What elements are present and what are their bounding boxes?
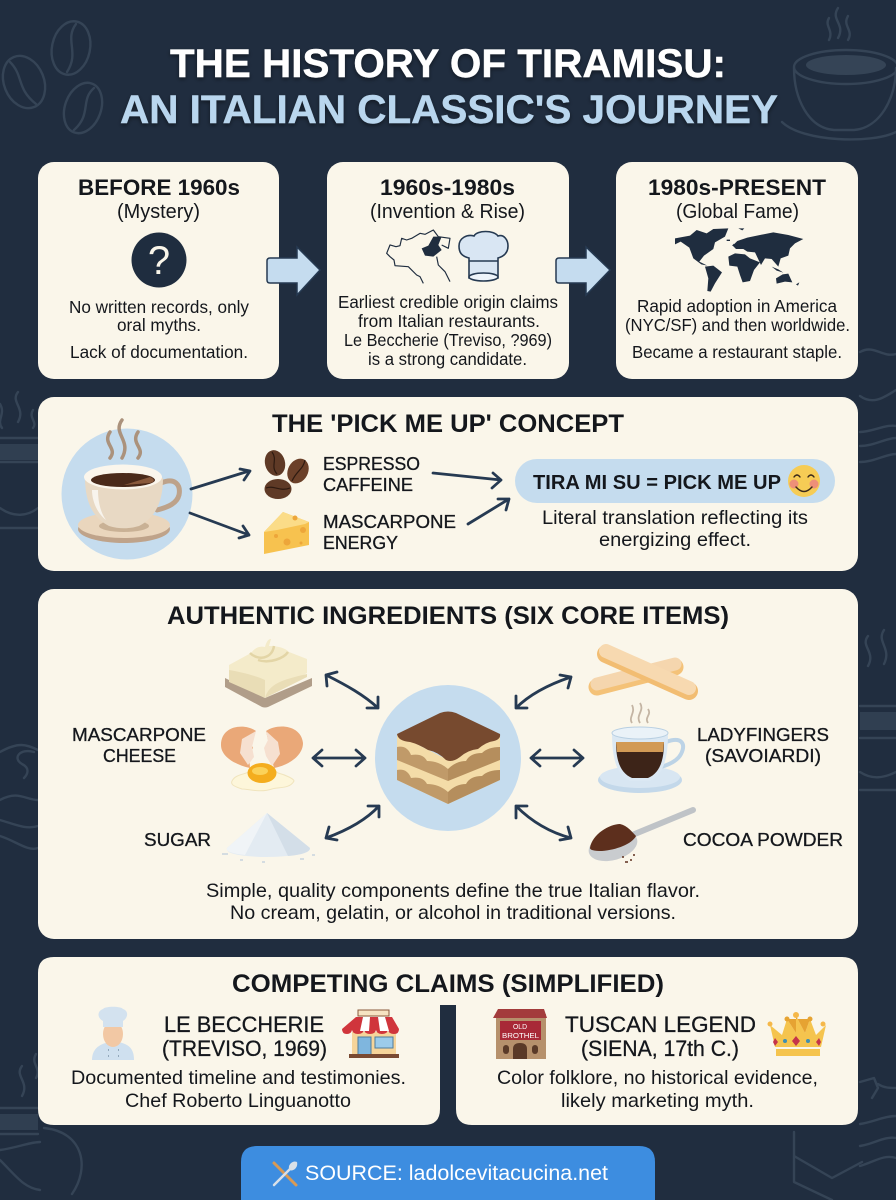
- icon: espresso cup: [598, 703, 683, 793]
- label: ladyfingers: LADYFINGERS: [697, 725, 829, 745]
- title: THE HISTORY OF TIRAMISU:: [170, 42, 726, 86]
- text: ingredients note: Simple, quality components define the true Italian flavor.: [206, 880, 700, 902]
- label: mascarpone: MASCARPONE: [323, 512, 456, 532]
- icon: chef hat: [459, 232, 508, 281]
- panel: 1980s-present: Rapid adoption in America: [637, 296, 837, 316]
- text: tuscan legend details: likely marketing myth.: [561, 1090, 754, 1112]
- icon: chef: [92, 1007, 134, 1060]
- panel: 1960s-1980s: (Invention & Rise): [370, 201, 525, 223]
- heading: THE 'PICK ME UP' CONCEPT: [272, 410, 624, 438]
- text: le beccherie details: [71, 1067, 406, 1112]
- heading: AUTHENTIC INGREDIENTS (SIX CORE ITEMS): [167, 602, 729, 630]
- source badge: [241, 1146, 655, 1200]
- panel: before 1960s: Lack of documentation.: [70, 342, 248, 362]
- icon: question mark: [132, 232, 186, 288]
- label: cocoa powder: COCOA POWDER: [683, 830, 843, 850]
- text: literal translation: [542, 507, 808, 551]
- heading: tuscan legend: TUSCAN LEGEND: [565, 1012, 756, 1037]
- icon: smiling face: [788, 465, 820, 497]
- icon: coffee beans: [262, 448, 313, 499]
- arrow: espresso to phrase: [433, 473, 501, 488]
- heading: le beccherie: [162, 1012, 327, 1061]
- arrow: cup to espresso: [191, 469, 250, 489]
- icon: crown: [768, 1012, 826, 1056]
- heading: tuscan legend: (SIENA, 17th C.): [581, 1036, 739, 1061]
- label: ladyfingers: (SAVOIARDI): [705, 746, 821, 766]
- label: mascarpone cheese: CHEESE: [103, 746, 176, 766]
- icon: cocoa spoon: [585, 810, 693, 866]
- text: ingredients note: No cream, gelatin, or alcohol in traditional versions.: [230, 902, 676, 924]
- panel: 1980s-present: (Global Fame): [676, 201, 799, 223]
- arrow: invention to global: [556, 247, 610, 295]
- icon: cheese: [264, 512, 309, 554]
- arrow: sugar link: [326, 806, 379, 840]
- panel: before 1960s: oral myths.: [117, 315, 201, 335]
- arrow: ladyfingers link: [516, 675, 571, 708]
- arrow: before to invention: [267, 247, 320, 295]
- icon: question mark: ?: [148, 239, 170, 283]
- label: espresso: [323, 454, 420, 495]
- text: le beccherie details: Chef Roberto Linguanotto: [125, 1090, 351, 1112]
- panel: competing claims: [38, 957, 858, 1125]
- panel: 1980s-present: 1980s-PRESENT: [648, 175, 827, 200]
- callout: tira mi su: TIRA MI SU = PICK ME UP: [533, 472, 781, 494]
- label: espresso: CAFFEINE: [323, 475, 413, 495]
- source badge: SOURCE: ladolcevitacucina.net: [305, 1162, 608, 1185]
- panel: 1960s-1980s: 1960s-1980s: [380, 175, 515, 200]
- text: tuscan legend details: [497, 1067, 818, 1112]
- text: literal translation: Literal translation reflecting its: [542, 507, 808, 529]
- icon: ladyfingers: [597, 651, 689, 691]
- heading: tuscan legend: [565, 1012, 756, 1061]
- panel: before 1960s: [38, 162, 279, 379]
- icon: map of northern Italy: [387, 230, 450, 283]
- heading: le beccherie: LE BECCHERIE: [164, 1012, 324, 1037]
- panel: 1960s-1980s: Earliest credible origin claims: [338, 292, 558, 312]
- panel: before 1960s: BEFORE 1960s: [78, 175, 240, 200]
- icon: shop: [342, 1010, 399, 1058]
- title: [120, 42, 778, 132]
- arrow: cup to mascarpone: [190, 513, 249, 538]
- callout: tira mi su: [515, 459, 835, 503]
- text: literal translation: energizing effect.: [599, 529, 751, 551]
- label: mascarpone: [323, 512, 456, 553]
- text: le beccherie details: Documented timeline and testimonies.: [71, 1067, 406, 1089]
- heading: le beccherie: (TREVISO, 1969): [162, 1036, 327, 1061]
- panel: authentic ingredients: [38, 589, 858, 939]
- panel: 1960s-1980s: Le Beccherie (Treviso, ?969): [344, 330, 552, 350]
- panel: before 1960s: (Mystery): [117, 201, 200, 223]
- icon: world map: [675, 228, 803, 292]
- icon: coffee cup: [62, 420, 192, 560]
- panel: 1980s-present: Became a restaurant staple.: [632, 342, 842, 362]
- panel: 1980s-present: (NYC/SF) and then worldwide.: [625, 315, 850, 335]
- panel: 1960s-1980s: is a strong candidate.: [368, 349, 527, 369]
- arrow: cream link: [326, 672, 378, 708]
- arrow: mascarpone to phrase: [468, 499, 509, 524]
- label: mascarpone: ENERGY: [323, 533, 398, 553]
- icon: tiramisu slice: [375, 685, 521, 831]
- panel: pick me up concept: [38, 397, 858, 571]
- label: ladyfingers: [697, 725, 829, 766]
- icon: old brothel: OLD: [513, 1024, 527, 1031]
- icon: sugar pile: [222, 813, 315, 862]
- icon: eggs: [221, 727, 303, 791]
- panel: before 1960s: No written records, only: [69, 297, 249, 317]
- icon: old brothel: [493, 1009, 547, 1059]
- text: ingredients note: [206, 880, 700, 924]
- label: sugar: SUGAR: [144, 830, 211, 850]
- icon: old brothel: BROTHEL: [502, 1033, 539, 1040]
- label: espresso: ESPRESSO: [323, 454, 420, 474]
- heading: COMPETING CLAIMS (SIMPLIFIED): [232, 970, 664, 998]
- label: mascarpone cheese: [72, 725, 206, 766]
- panel: 1960s-1980s: from Italian restaurants.: [358, 311, 540, 331]
- panel: 1960s-1980s: [327, 162, 569, 379]
- icon: mascarpone cheese: [225, 639, 312, 708]
- label: mascarpone cheese: MASCARPONE: [72, 725, 206, 745]
- panel: 1980s-present: [616, 162, 858, 379]
- text: tuscan legend details: Color folklore, no historical evidence,: [497, 1067, 818, 1089]
- icon: fork and spoon: [274, 1160, 299, 1185]
- arrow: cocoa link: [516, 806, 571, 840]
- title: AN ITALIAN CLASSIC'S JOURNEY: [120, 88, 778, 132]
- arrow: espresso link: [531, 750, 583, 766]
- arrow: eggs link: [313, 750, 365, 766]
